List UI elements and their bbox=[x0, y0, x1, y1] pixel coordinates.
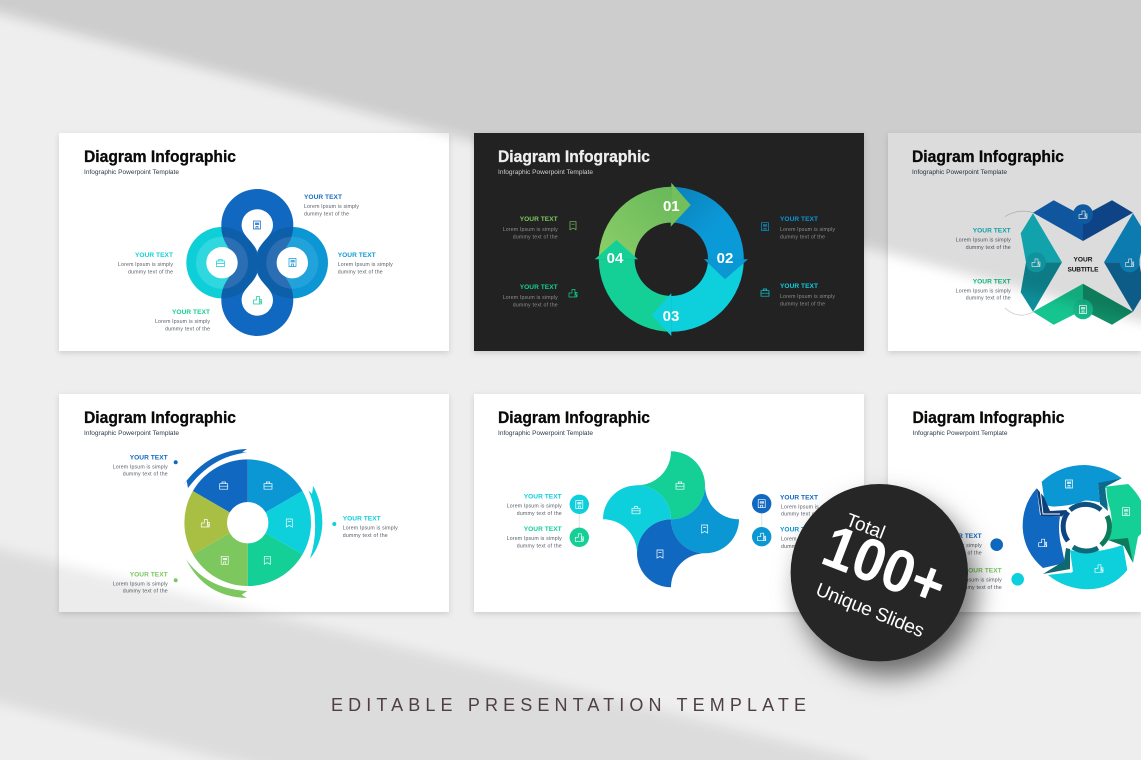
text block: lower right: dummy text of the bbox=[780, 301, 825, 307]
text block: right lower: Lorem Ipsum is simply bbox=[781, 537, 836, 543]
text block: lower: Lorem Ipsum is simply bbox=[947, 578, 1002, 584]
text block: upper left: dummy text of the bbox=[513, 234, 558, 240]
text block: upper left: Lorem Ipsum is simply bbox=[503, 227, 558, 233]
panel: slide 6 twisted ring bbox=[888, 394, 1141, 612]
text block: right: Lorem Ipsum is simply bbox=[343, 526, 398, 532]
text block: right upper: Lorem Ipsum is simply bbox=[781, 504, 836, 510]
badge: total 100+ unique slides bbox=[791, 484, 968, 661]
text block: lower: dummy text of the bbox=[966, 296, 1011, 302]
text block: left: Lorem Ipsum is simply bbox=[118, 262, 173, 268]
text block: top right bbox=[304, 194, 359, 217]
text block: lower: YOUR TEXT bbox=[964, 568, 1002, 575]
text block: right upper: dummy text of the bbox=[781, 512, 826, 518]
text block: bottom bbox=[113, 571, 168, 595]
text block: lower bbox=[947, 568, 1002, 591]
arrow: right swoosh bbox=[308, 486, 322, 559]
marker dots bbox=[990, 538, 1024, 586]
text block: right bbox=[338, 252, 393, 275]
number 02: 02 bbox=[717, 250, 733, 267]
subtitle: Infographic Powerpoint Template bbox=[912, 430, 1008, 437]
center subtitle: SUBTITLE bbox=[1068, 267, 1099, 274]
panel: slide 1 petals bbox=[59, 133, 449, 351]
badge number: 100+ bbox=[814, 512, 956, 620]
text block: left lower: YOUR TEXT bbox=[524, 526, 562, 533]
text block: upper left bbox=[503, 216, 558, 240]
text block: upper: dummy text of the bbox=[966, 245, 1011, 251]
text block: upper: Lorem Ipsum is simply bbox=[956, 238, 1011, 244]
chart: four overlapping rings bbox=[186, 189, 328, 336]
text block: right bbox=[343, 516, 398, 539]
text block: top bbox=[113, 454, 168, 478]
text block: upper: YOUR TEXT bbox=[944, 533, 982, 540]
center subtitle: YOUR bbox=[1073, 257, 1093, 264]
text block: lower left: YOUR TEXT bbox=[520, 284, 558, 291]
text block: right: dummy text of the bbox=[338, 269, 383, 275]
text block: upper right: dummy text of the bbox=[780, 234, 825, 240]
text block: left lower: Lorem Ipsum is simply bbox=[507, 536, 562, 542]
title: Diagram Infographic bbox=[84, 147, 236, 166]
text block: right lower: YOUR TEXT bbox=[780, 527, 818, 534]
text block: upper: YOUR TEXT bbox=[973, 228, 1011, 235]
text block: right upper bbox=[780, 494, 836, 518]
text block: lower right bbox=[780, 283, 835, 307]
text block: top: Lorem Ipsum is simply bbox=[113, 464, 168, 470]
number 01: 01 bbox=[663, 198, 680, 215]
number 03: 03 bbox=[663, 308, 679, 325]
text block: right: dummy text of the bbox=[343, 533, 388, 539]
text block: top: YOUR TEXT bbox=[130, 454, 168, 461]
chart: four arrow ring bbox=[1023, 465, 1141, 589]
title: Diagram Infographic bbox=[912, 408, 1064, 427]
text block: right: YOUR TEXT bbox=[343, 516, 381, 523]
text block: upper right: YOUR TEXT bbox=[780, 216, 818, 223]
title: Diagram Infographic bbox=[498, 147, 650, 166]
subtitle: Infographic Powerpoint Template bbox=[84, 430, 180, 437]
text block: bottom: dummy text of the bbox=[123, 589, 168, 595]
badge text: total: Total bbox=[843, 510, 888, 544]
text block: lower left: dummy text of the bbox=[513, 302, 558, 308]
subtitle: Infographic Powerpoint Template bbox=[498, 430, 594, 437]
text block: right: YOUR TEXT bbox=[338, 252, 376, 259]
text block: bottom: Lorem Ipsum is simply bbox=[113, 581, 168, 587]
text block: left upper bbox=[507, 494, 562, 517]
text block: bottom: YOUR TEXT bbox=[130, 571, 168, 578]
text block: lower right: Lorem Ipsum is simply bbox=[780, 294, 835, 300]
text block: upper right bbox=[780, 216, 835, 240]
chart: four chevrons bbox=[1005, 200, 1141, 325]
subtitle: Infographic Powerpoint Template bbox=[84, 169, 180, 176]
badge text: unique slides: Unique Slides bbox=[813, 579, 927, 642]
chart: four arrow cycle bbox=[595, 183, 748, 336]
text block: right: Lorem Ipsum is simply bbox=[338, 262, 393, 268]
text block: right upper: YOUR TEXT bbox=[780, 494, 818, 501]
text block: upper: dummy text of the bbox=[937, 550, 982, 556]
text block: upper bbox=[927, 533, 982, 556]
title: Diagram Infographic bbox=[84, 408, 236, 427]
text block: left upper: YOUR TEXT bbox=[524, 494, 562, 501]
text block: lower right: YOUR TEXT bbox=[780, 283, 818, 290]
panel: slide 5 pinwheel bbox=[474, 394, 864, 612]
chart: four petals bbox=[603, 451, 739, 587]
subtitle: Infographic Powerpoint Template bbox=[912, 169, 1008, 176]
text block: top right: Lorem Ipsum is simply bbox=[304, 204, 359, 210]
icon nodes left bbox=[570, 495, 589, 547]
text block: left upper: Lorem Ipsum is simply bbox=[507, 504, 562, 510]
footer caption: EDITABLE PRESENTATION TEMPLATE bbox=[331, 695, 806, 715]
text block: left upper: dummy text of the bbox=[517, 511, 562, 517]
text block: upper left: YOUR TEXT bbox=[520, 216, 558, 223]
number 04: 04 bbox=[607, 250, 624, 267]
text block: upper bbox=[956, 228, 1011, 251]
center subtitle bbox=[1068, 257, 1099, 274]
panel: slide 3 cross bbox=[888, 133, 1141, 351]
text block: top right: dummy text of the bbox=[304, 211, 349, 217]
subtitle: Infographic Powerpoint Template bbox=[498, 169, 594, 176]
icon nodes right bbox=[752, 494, 771, 546]
arrow: top swoosh bbox=[184, 449, 247, 488]
text block: bottom left: dummy text of the bbox=[165, 326, 210, 332]
text block: lower bbox=[956, 278, 1011, 302]
text block: lower: YOUR TEXT bbox=[973, 278, 1011, 285]
panel: slide 4 pie bbox=[59, 394, 449, 612]
text block: lower left bbox=[503, 284, 558, 308]
text block: top right: YOUR TEXT bbox=[304, 194, 342, 201]
text block: left lower bbox=[507, 526, 562, 549]
text block: left lower: dummy text of the bbox=[517, 543, 562, 549]
text block: right lower: dummy text of the bbox=[781, 544, 826, 550]
text block: left: dummy text of the bbox=[128, 269, 173, 275]
text block: top: dummy text of the bbox=[123, 472, 168, 478]
text block: bottom left: YOUR TEXT bbox=[172, 309, 210, 316]
text block: bottom left: Lorem Ipsum is simply bbox=[155, 319, 210, 325]
text block: lower: dummy text of the bbox=[957, 585, 1002, 591]
text block: lower left: Lorem Ipsum is simply bbox=[503, 295, 558, 301]
panel: slide 2 dark cycle bbox=[474, 133, 864, 351]
icons bbox=[569, 222, 769, 297]
text block: right lower bbox=[780, 527, 836, 550]
text block: left: YOUR TEXT bbox=[135, 252, 173, 259]
title: Diagram Infographic bbox=[498, 408, 650, 427]
marker dots bbox=[174, 460, 336, 582]
arrow: bottom swoosh bbox=[186, 559, 247, 598]
text block: upper right: Lorem Ipsum is simply bbox=[780, 227, 835, 233]
text block: left bbox=[118, 252, 173, 275]
text block: lower: Lorem Ipsum is simply bbox=[956, 288, 1011, 294]
text block: bottom left bbox=[155, 309, 210, 332]
title: Diagram Infographic bbox=[912, 147, 1064, 166]
text block: upper: Lorem Ipsum is simply bbox=[927, 543, 982, 549]
chart: six segment donut bbox=[184, 459, 311, 586]
